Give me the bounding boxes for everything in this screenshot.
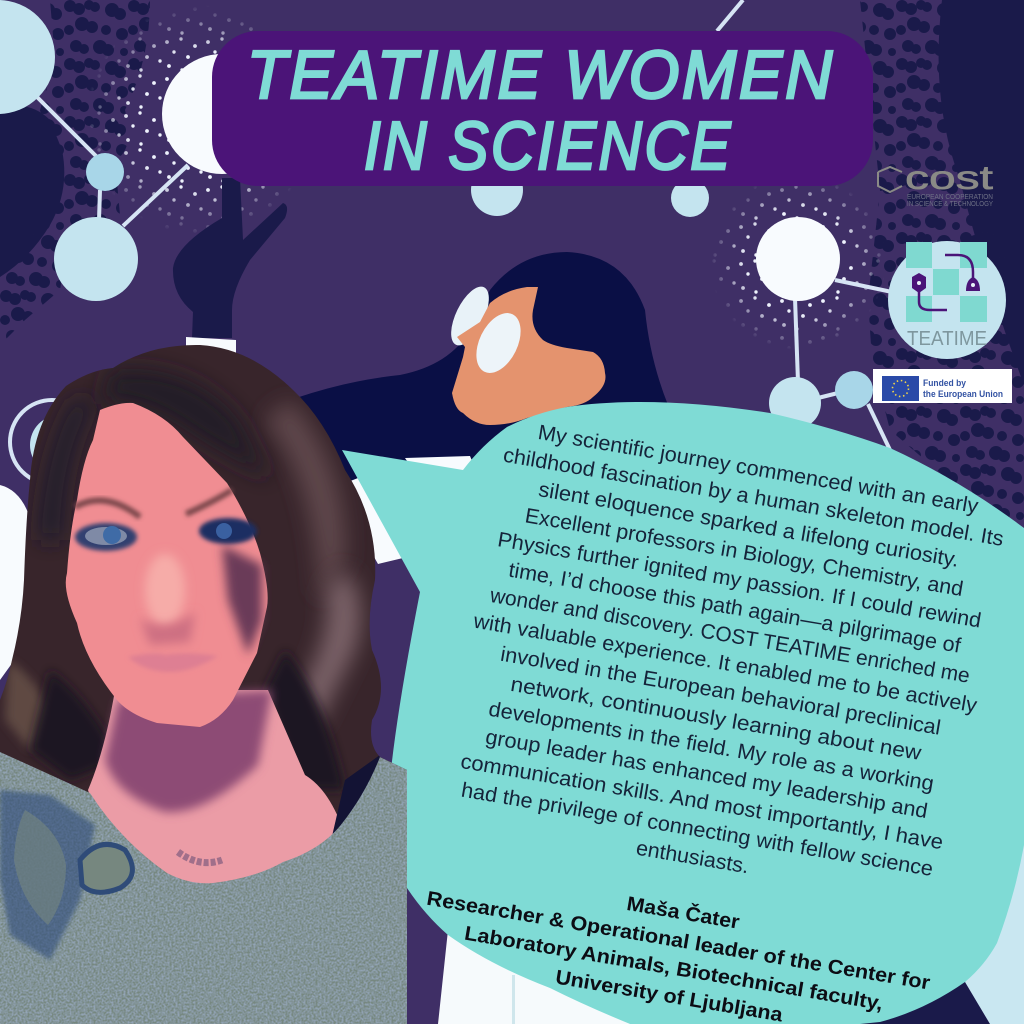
hair [0, 340, 410, 840]
neck and chest [88, 690, 345, 890]
bubble quote text: group leader has enhanced my leadership and [484, 726, 929, 823]
bubble quote text: network, continuously learning about new [509, 673, 924, 765]
bubble quote text: wonder and discovery. COST TEATIME enriched me [487, 584, 971, 688]
bubble quote text: had the privilege of connecting with fellow science [460, 779, 935, 881]
TEATIME logo: TEATIME [907, 328, 987, 350]
COST logo: EUROPEAN COOPERATION [907, 192, 993, 201]
bubble quote text: developments in the field. My role as a working [487, 698, 935, 796]
EU funding badge: the European Union [923, 389, 1003, 400]
eyes and brows [75, 490, 257, 551]
bubble quote text: silent eloquence sparked a lifelong curiosity. [537, 478, 961, 572]
bubble quote text: Excellent professors in Biology, Chemistry, and [523, 504, 965, 601]
scientist raised hand [173, 178, 287, 354]
title text: IN SCIENCE [364, 108, 733, 184]
speech bubble [342, 402, 1024, 1024]
bubble quote text: Physics further ignited my passion. If I could rewind [496, 528, 983, 633]
title text: TEATIME WOMEN [247, 37, 835, 113]
bubble quote text: communication skills. And most importantly, I have [459, 750, 945, 854]
lips [128, 653, 218, 672]
author name and role: Researcher & Operational leader of the Center for [425, 888, 932, 995]
author name and role: Laboratory Animals, Biotechnical faculty, [463, 923, 885, 1015]
title text [247, 37, 835, 184]
author name and role: Maša Čater [625, 891, 742, 934]
molecule network top and right [471, 0, 892, 450]
COST logo: cost [905, 159, 993, 196]
white speckle cloud left [90, 8, 290, 232]
bubble quote text: involved in the European behavioral preclinical [499, 643, 942, 740]
bubble quote text: childhood fascination by a human skeleton model. Its [502, 444, 1005, 551]
shirt [0, 745, 410, 1024]
face [66, 403, 268, 727]
necklace [178, 852, 222, 863]
EU funding badge: Funded by [923, 378, 967, 389]
COST logo [878, 159, 993, 208]
dark blob left [0, 106, 64, 277]
bubble quote text [438, 416, 1012, 911]
TEATIME logo [888, 241, 1006, 359]
molecule network left [0, 0, 282, 301]
author name and role: University of Ljubljana [554, 966, 785, 1024]
photo of Maša Čater [0, 340, 410, 1024]
dark top strap [332, 756, 380, 834]
scientist head and hair [296, 252, 668, 480]
speckle texture right [860, 0, 1024, 540]
scientist white coat [345, 456, 1024, 1024]
speckle texture top left [0, 0, 150, 345]
title banner [212, 31, 873, 186]
bubble quote text: with valuable experience. It enabled me to be actively [471, 610, 979, 717]
bubble quote text: enthusiasts. [634, 837, 751, 878]
dark corner shape top right [939, 0, 1024, 385]
COST logo: IN SCIENCE & TECHNOLOGY [907, 199, 993, 208]
hair highlights [5, 369, 361, 790]
bubble quote text: My scientific journey commenced with an early [536, 421, 980, 518]
EU funding badge [873, 369, 1012, 403]
white speckle cloud right [712, 186, 880, 348]
author name and role [416, 858, 937, 1024]
bubble quote text: time, I’d choose this path again—a pilgrimage of [507, 559, 963, 658]
ring molecule behind photo [0, 400, 94, 680]
